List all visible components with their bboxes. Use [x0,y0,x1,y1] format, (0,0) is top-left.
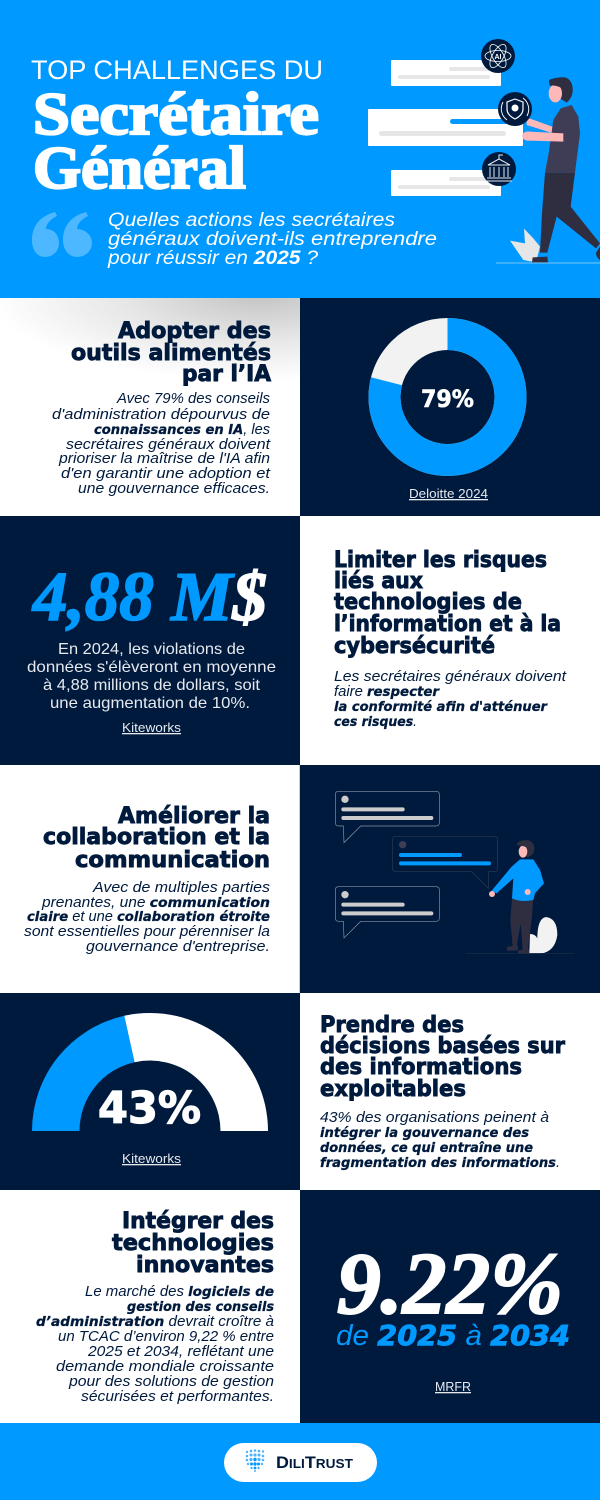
heading: limiter: technologies de [334,590,522,615]
heading: limiter: cybersécurité [334,634,495,659]
heading: intégrer: Intégrer des [122,1209,274,1234]
illustration: person arranging cards [368,39,600,263]
text: prendre [320,1109,560,1171]
wordmark: DILITRUST [276,1453,353,1472]
text: adopter: prioriser la maîtrise de l'IA afin [58,450,270,467]
intro question: généraux doivent-ils entreprendre [108,229,437,250]
title: TOP CHALLENGES DU [31,55,323,85]
source: kiteworks: Kiteworks [122,1151,182,1166]
gauge chart 43% [32,1013,268,1134]
text: améliorer: gouvernance d'entreprise. [86,938,270,955]
bubble 2 [393,836,498,889]
bubble 1 [335,791,439,843]
card 3 [391,170,501,196]
bubble 3 [335,887,439,938]
text: adopter: secrétaires généraux doivent [66,436,271,453]
panel: donut [300,298,600,516]
text: prendre: données, ce qui entraîne une [320,1140,533,1156]
text: intégrer: 2025 et 2034, reflétant une [87,1343,274,1360]
text: breach cost [27,641,276,712]
text: limiter: Les secrétaires généraux doivent [334,668,567,685]
text: intégrer: pour des solutions de gestion [68,1373,274,1390]
ground line [466,952,574,955]
heading: améliorer [43,804,270,873]
heading: prendre [320,1013,565,1102]
icon: shield [498,92,532,126]
text: breach cost: données s'élèveront en moyenne [27,659,276,676]
panel: innovation [0,1190,300,1423]
intro question: pour réussir en 2025 ? [107,248,318,269]
text: intégrer: d’administration devrait croître à [36,1313,274,1330]
title [31,55,323,201]
panel: IA tools [0,298,300,516]
text: intégrer: Le marché des logiciels de [85,1283,274,1300]
panel: gauge [0,993,300,1190]
intro question: Quelles actions les secrétaires [108,210,396,231]
heading: améliorer: communication [75,848,270,873]
text: breach cost: une augmentation de 10%. [50,695,250,712]
text: améliorer: Avec de multiples parties [92,879,271,896]
title: Secrétaire [33,81,319,147]
panel: collaboration [0,765,300,993]
source: kiteworks: Kiteworks [122,720,182,735]
heading: limiter: liés aux [334,569,423,594]
donut chart 79%: 79% [421,385,474,413]
intro question [107,210,437,269]
text: adopter: connaissances en IA, les [94,421,270,438]
heading: limiter: Limiter les risques [334,548,547,573]
panel: decisions [300,993,600,1190]
text: intégrer: gestion des conseils [127,1299,274,1315]
text: améliorer [24,879,271,955]
text: intégrer: demande mondiale croissante [56,1358,274,1375]
text: prendre: fragmentation des informations. [320,1154,560,1171]
panel: breach cost [0,516,300,765]
heading: intégrer: technologies [112,1231,274,1256]
person [496,77,600,263]
heading: adopter: outils alimentés [71,341,271,366]
text: intégrer [36,1283,274,1405]
stat: 9.22%: 9.22% [337,1236,563,1333]
card 2 [368,109,523,146]
stat: 4,88 M$: 4,88 M$ [31,559,267,636]
text: limiter: ces risques. [334,713,417,730]
heading: intégrer: innovantes [136,1253,274,1278]
person [489,840,557,954]
source: mrfr: MRFR [435,1379,471,1394]
panel: header [31,39,600,269]
heading: prendre: exploitables [320,1077,466,1102]
heading: adopter [71,319,271,387]
panel: cyber risks [300,516,600,765]
heading: adopter: Adopter des [118,319,271,344]
text: améliorer: prenantes, une communication [41,894,270,911]
text: adopter: Avec 79% des conseils [116,390,270,407]
source: deloitte: Deloitte 2024 [409,486,488,501]
title: Général [33,135,246,201]
heading: améliorer: collaboration et la [43,825,270,850]
heading: limiter: l’information et à la [334,612,561,637]
logo: DiliTrust [224,1443,377,1482]
panel: market growth [300,1190,600,1423]
text: adopter: d'administration dépourvus de [52,406,270,423]
heading: adopter: par l’IA [182,362,271,387]
text: intégrer: un TCAC d’environ 9,22 % entre [58,1328,274,1345]
text: intégrer: sécurisées et performantes. [81,1388,274,1405]
text: breach cost: En 2024, les violations de [58,641,245,658]
heading: prendre: décisions basées sur [320,1034,565,1059]
heading: prendre: des informations [320,1055,522,1080]
illustration: chat bubbles and person [335,791,574,954]
text: améliorer: claire et une collaboration étroite [27,908,270,925]
text: adopter: d'en garantir une adoption et [61,465,271,482]
text: prendre: intégrer la gouvernance des [320,1125,529,1141]
text: adopter: une gouvernance efficaces. [78,480,270,497]
panel: chat illustration [299,765,600,993]
text: limiter [334,668,567,730]
text: prendre: 43% des organisations peinent à [320,1109,549,1126]
heading: prendre: Prendre des [320,1013,464,1038]
text: améliorer: sont essentielles pour pérenniser la [24,923,270,940]
icon: AI atom [481,39,515,73]
card 1 [391,60,501,86]
text: adopter [52,390,271,497]
text: breach cost: à 4,88 millions de dollars, soit [43,677,261,694]
heading: améliorer: Améliorer la [118,804,270,829]
icon: institution [482,152,516,186]
icon: quotation marks [32,212,92,257]
gauge chart 43%: 43% [98,1083,201,1134]
donut chart 79% [384,334,510,460]
text: limiter: faire respecter [334,683,440,700]
icon: dotted shield [246,1449,264,1472]
text: limiter: la conformité afin d'atténuer [334,699,548,715]
heading: limiter [334,548,561,659]
stat: period: de 2025 à 2034 [336,1319,570,1352]
heading: intégrer [112,1209,274,1278]
icon: AI atom: AI [494,54,502,61]
